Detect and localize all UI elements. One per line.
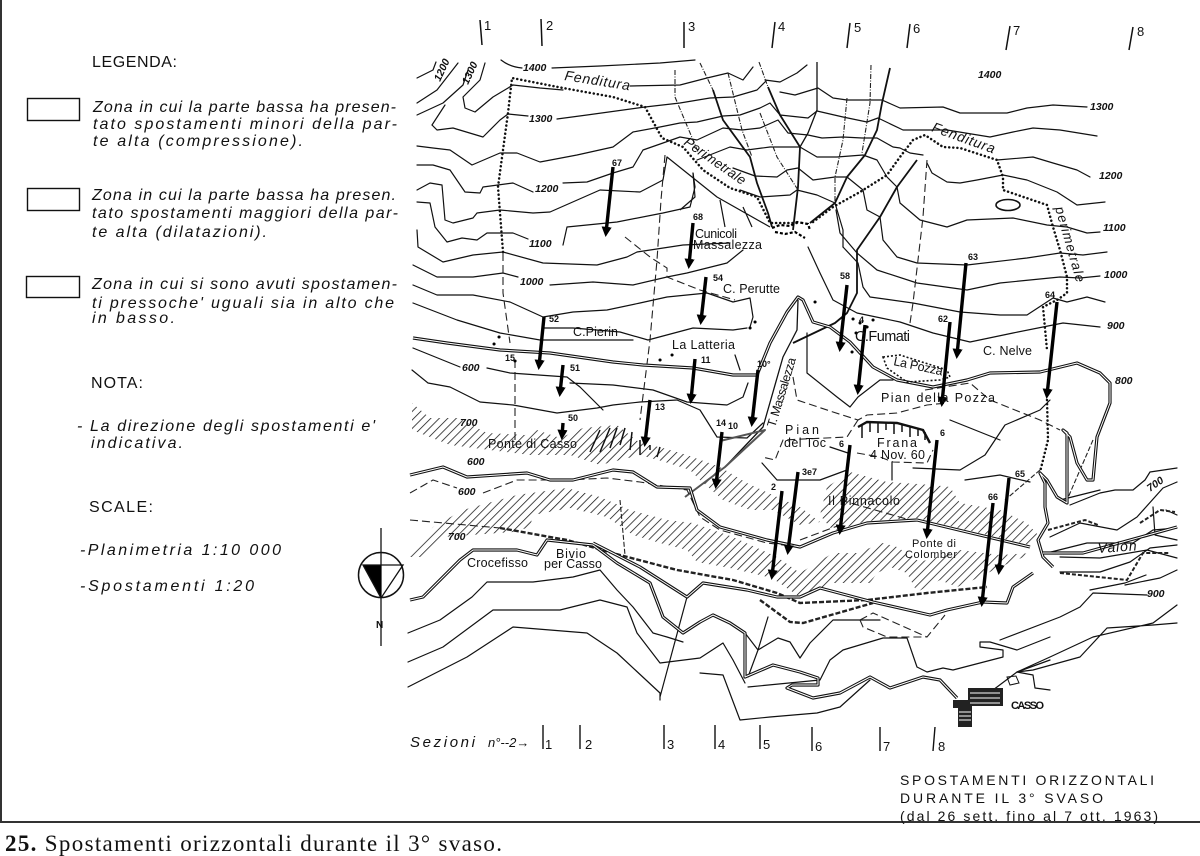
map: arrow numbers: 54 xyxy=(713,273,723,283)
map: Perimetrale dotted line xyxy=(498,78,1067,472)
label: Casso: CASSO xyxy=(1011,700,1044,712)
map: arrow numbers: 66 xyxy=(988,492,998,502)
map: pond xyxy=(996,200,1020,210)
map: arrow numbers: 6 xyxy=(839,439,844,449)
map: contour elevation labels: 900 xyxy=(1107,320,1125,332)
map: contour lines xyxy=(408,60,1177,720)
top section ticks: 1 xyxy=(484,18,491,33)
scale block: -Planimetria 1:10 000 xyxy=(80,542,281,559)
map title block xyxy=(900,772,1158,824)
map: contour elevation labels: 1200 xyxy=(1099,170,1123,182)
map: place names: Pian xyxy=(785,423,819,437)
legend item: spostamenti uguali: Zona in cui si sono avuti spostamen- xyxy=(91,276,397,293)
bottom section ticks: 7 xyxy=(883,739,890,754)
map: place names: C. Perutte xyxy=(723,282,780,296)
map: place names: Valon xyxy=(1097,537,1137,556)
map: place names: Ponte di xyxy=(912,538,956,550)
map: landslide scarp Frana xyxy=(858,422,930,443)
map: contour elevation labels: 700 xyxy=(1145,474,1166,494)
map: place names: T. Massalezza xyxy=(764,356,799,429)
map: contour elevation labels: 1200 xyxy=(535,183,559,195)
map: arrow numbers: 15 xyxy=(505,353,515,363)
top section ticks: 3 xyxy=(688,19,695,34)
map: place names: Colomber xyxy=(905,549,957,561)
top section ticks: 6 xyxy=(913,21,920,36)
note block xyxy=(77,375,376,452)
map: place names: Perimetrale xyxy=(681,134,749,188)
map: Cunicoli entrance marks xyxy=(772,222,810,238)
note block: NOTA: xyxy=(91,375,143,392)
figure caption: 25. Spostamenti orizzontali durante il 3° svaso. xyxy=(5,831,502,856)
map: arrow numbers: 14 xyxy=(716,418,726,428)
legend item: compressione xyxy=(28,98,397,150)
map: arrow numbers: 6 xyxy=(940,428,945,438)
map: place names: Pian della Pozza xyxy=(881,391,995,405)
legend item: dilatazioni: te alta (dilatazioni). xyxy=(92,224,267,241)
map: place names: Bivio xyxy=(556,547,586,561)
bottom section ticks: 5 xyxy=(763,737,770,752)
map: arrow numbers: 11 xyxy=(701,355,711,365)
legend item: compressione: tato spostamenti minori della par- xyxy=(93,116,397,133)
legend panel xyxy=(26,54,398,327)
map: place names: per Casso xyxy=(544,557,602,571)
map: arrow numbers: 58 xyxy=(840,271,850,281)
map: contour elevation labels: 1200 xyxy=(432,57,453,83)
map: Casso village xyxy=(953,676,1044,727)
map: contour elevation labels: 600 xyxy=(467,456,485,468)
top section ticks: 7 xyxy=(1013,23,1020,38)
icon: north arrow xyxy=(358,528,404,646)
map: arrow numbers: 52 xyxy=(549,314,559,324)
scale block: SCALE: xyxy=(89,499,153,516)
map: La Pozza dotted outline xyxy=(883,355,950,382)
map: place names: C. Nelve xyxy=(983,344,1032,358)
note block: indicativa. xyxy=(91,435,183,452)
bottom section ticks: Sezioni xyxy=(410,734,476,751)
map: contour elevation labels: 1300 xyxy=(460,60,481,86)
icon: north arrow: N xyxy=(376,620,383,631)
legend item: spostamenti uguali: ti pressoche' uguali sia in alto che xyxy=(92,295,394,312)
map: contour elevation labels: 1400 xyxy=(978,69,1002,81)
legend item: spostamenti uguali xyxy=(26,276,397,327)
top section ticks xyxy=(480,18,1144,50)
legend item: spostamenti uguali: in basso. xyxy=(92,310,175,327)
map: place names: Fenditura xyxy=(564,67,631,93)
map: contour elevation labels: 700 xyxy=(460,417,478,429)
map: place names: Ponte di Casso xyxy=(488,437,577,451)
map: Ponte di Casso cliff hachures xyxy=(590,428,660,457)
map: arrow numbers: 65 xyxy=(1015,469,1025,479)
map: dashed lake and service lines xyxy=(410,377,1175,637)
map: contour elevation labels: 1300 xyxy=(529,113,553,125)
map: arrow numbers: 62 xyxy=(938,314,948,324)
bottom section ticks: 4 xyxy=(718,737,725,752)
legend item: dilatazioni xyxy=(28,187,398,241)
map: arrow numbers: 4 xyxy=(859,315,864,325)
map: dash-dot section traces xyxy=(410,62,1093,555)
legend item: compressione: Zona in cui la parte bassa ha presen- xyxy=(92,99,396,116)
legend item: dilatazioni: tato spostamenti maggiori della par- xyxy=(92,205,398,222)
map xyxy=(408,18,1177,754)
map: arrow numbers xyxy=(505,158,1055,502)
map: place names: Massalezza xyxy=(693,238,762,252)
map: place names xyxy=(467,67,1137,571)
map: contour elevation labels: 700 xyxy=(448,531,466,543)
map: place names: Crocefisso xyxy=(467,556,528,570)
map: place names: La Latteria xyxy=(672,338,735,352)
note block: - La direzione degli spostamenti e' xyxy=(77,418,376,435)
bottom section ticks: 3 xyxy=(667,737,674,752)
map: hatched zones xyxy=(410,403,1040,597)
legend item: dilatazioni: Zona in cui la parte bassa ha presen. xyxy=(91,187,396,204)
scale block xyxy=(80,499,281,595)
map: arrow numbers: 10° xyxy=(757,359,771,369)
map: contour elevation labels: 1000 xyxy=(1104,269,1128,281)
map: double-line roads xyxy=(410,297,1177,698)
bottom section ticks: 1 xyxy=(545,737,552,752)
map: arrow numbers: 68 xyxy=(693,212,703,222)
map: contour elevation labels: 1100 xyxy=(1103,222,1126,234)
map: place names: C.Pierin xyxy=(573,325,618,339)
legend item: compressione: te alta (compressione). xyxy=(93,133,303,150)
bottom section ticks: n°--2→ xyxy=(488,735,529,750)
map: place names: Cunicoli xyxy=(695,227,737,241)
map: contour elevation labels: 1400 xyxy=(523,62,547,74)
map: scattered house dots xyxy=(494,302,873,361)
map: contour elevation labels: 600 xyxy=(462,362,480,374)
map: contour elevation labels: 800 xyxy=(1115,375,1133,387)
map title block: (dal 26 sett. fino al 7 ott. 1963) xyxy=(900,808,1158,824)
top section ticks: 4 xyxy=(778,19,785,34)
map: arrow numbers: 50 xyxy=(568,413,578,423)
bottom section ticks: 8 xyxy=(938,739,945,754)
map: place names: perimetrale xyxy=(1052,204,1088,284)
map: arrow numbers: 3e7 xyxy=(802,467,817,477)
map: arrow numbers: 64 xyxy=(1045,290,1055,300)
map: arrow numbers: 13 xyxy=(655,402,665,412)
bottom section ticks: 2 xyxy=(585,737,592,752)
map title block: DURANTE IL 3° SVASO xyxy=(900,790,1103,806)
map: place names: Frana xyxy=(877,436,917,450)
scale block: -Spostamenti 1:20 xyxy=(80,578,254,595)
map: contour elevation labels: 900 xyxy=(1147,588,1165,600)
map: contour elevation labels: 1300 xyxy=(1090,101,1114,113)
map: arrow numbers: 51 xyxy=(570,363,580,373)
top section ticks: 5 xyxy=(854,20,861,35)
map: contour elevation labels: 1000 xyxy=(520,276,544,288)
map: arrow numbers: 63 xyxy=(968,252,978,262)
map title block: SPOSTAMENTI ORIZZONTALI xyxy=(900,772,1154,788)
map: contour elevation labels xyxy=(432,57,1166,600)
top section ticks: 8 xyxy=(1137,24,1144,39)
map: place names: 4 Nov. 60 xyxy=(870,448,925,462)
map: arrow numbers: 2 xyxy=(771,482,776,492)
map: displacement arrows xyxy=(539,167,1057,603)
map: contour elevation labels: 1100 xyxy=(529,238,552,250)
map: place names: Il Pinnacolo xyxy=(828,494,900,508)
map: contour elevation labels: 600 xyxy=(458,486,476,498)
map: place names: del Toc xyxy=(784,436,826,450)
map: place names: C.Fumati xyxy=(855,329,910,345)
map: streams xyxy=(667,62,917,497)
bottom section ticks xyxy=(410,725,945,754)
top section ticks: 2 xyxy=(546,18,553,33)
map: arrow numbers: 10 xyxy=(728,421,738,431)
bottom section ticks: 6 xyxy=(815,739,822,754)
map: arrow numbers: 67 xyxy=(612,158,622,168)
legend heading: LEGENDA: xyxy=(92,54,177,71)
map: place names: Fenditura xyxy=(930,119,998,156)
map: place names: La Pozza xyxy=(892,354,944,378)
